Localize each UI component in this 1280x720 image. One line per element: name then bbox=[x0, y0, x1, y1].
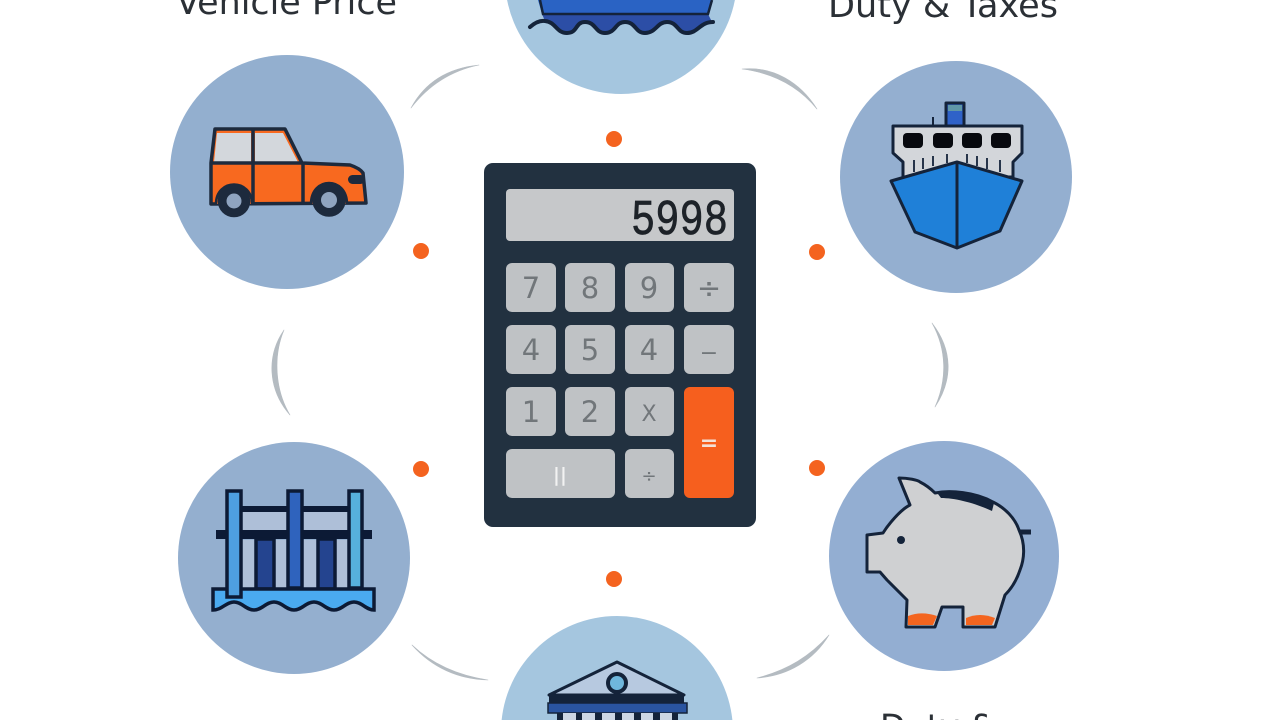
icon: cargo ship bow bbox=[891, 103, 1022, 248]
calculator keypad: 7 bbox=[522, 271, 540, 305]
calculator keypad: − bbox=[700, 341, 718, 366]
calculator bbox=[484, 163, 756, 527]
panel: vehicle price car circle bbox=[170, 55, 404, 289]
calculator keypad: 4 bbox=[522, 333, 540, 367]
calculator keypad bbox=[506, 263, 734, 498]
calculator keypad: ÷ bbox=[641, 466, 657, 487]
calculator keypad: = bbox=[700, 431, 718, 456]
calculator keypad: X bbox=[641, 402, 657, 427]
calculator keypad: || bbox=[553, 464, 567, 486]
calculator display bbox=[506, 189, 734, 250]
calculator keypad: 1 bbox=[522, 395, 540, 429]
panel: shipping top circle (cropped) bbox=[505, 0, 737, 94]
calculator keypad: ÷ bbox=[697, 271, 721, 305]
icon: orange car bbox=[211, 129, 366, 216]
calculator keypad: 4 bbox=[640, 333, 658, 367]
calculator display: 5998 bbox=[631, 193, 728, 250]
panel: port gate circle bbox=[178, 442, 410, 674]
calculator keypad: 9 bbox=[640, 271, 658, 305]
icon: ship hull on waves bbox=[530, 0, 713, 33]
connector arcs bbox=[272, 65, 948, 680]
icon: piggy bank bbox=[867, 478, 1031, 627]
icon: dam and water bbox=[213, 491, 374, 610]
panel: shipping ship circle bbox=[840, 61, 1072, 293]
orange connector dots bbox=[413, 131, 825, 587]
calculator keypad: 2 bbox=[581, 395, 599, 429]
icon: government building bbox=[548, 662, 687, 720]
panel: savings piggy bank circle bbox=[829, 441, 1059, 671]
calculator keypad: 5 bbox=[581, 333, 599, 367]
calculator keypad: 8 bbox=[581, 271, 599, 305]
panel: customs building circle (cropped) bbox=[501, 616, 733, 720]
